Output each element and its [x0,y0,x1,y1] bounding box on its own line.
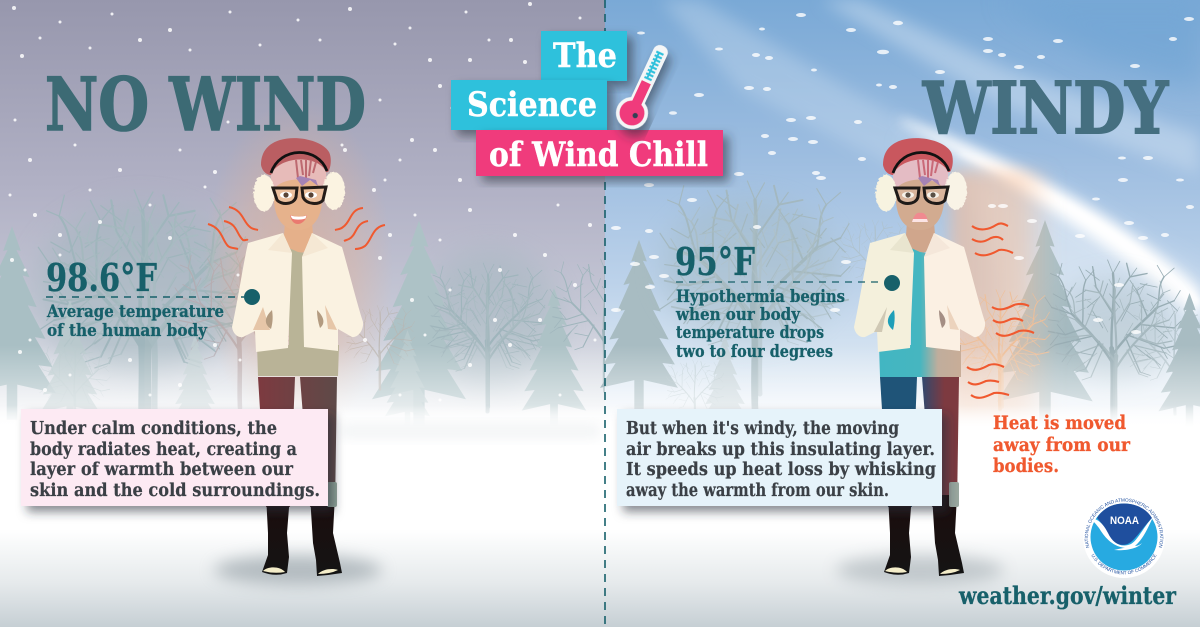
logo: NOAA [1084,498,1164,578]
panel: windy conditions note [617,409,942,506]
text line 4: away the warmth from our skin. [626,481,889,501]
beanie stripes [296,160,316,178]
panel: windy background [600,0,1200,627]
heat note [993,412,1131,477]
line 3: bodies. [993,455,1059,477]
ground shadow: left figure [214,555,382,585]
jacket right [302,233,363,351]
hands [253,305,337,330]
trouser right [922,377,959,507]
line 3: temperature drops [676,323,824,343]
leader line [46,296,244,298]
collar right [924,233,950,257]
pockets [266,310,323,329]
title block: the science of wind chill [451,31,723,176]
line 1: Hypothermia begins [676,287,845,307]
glasses [273,187,326,203]
boot soles [263,567,338,574]
logo: NOAA: NOAA [1110,515,1139,527]
neck [905,222,936,254]
heat waves: right figure [967,223,1034,398]
trousers [258,377,337,507]
callout: 98.6 F [46,255,260,341]
jacket right [924,233,985,351]
snow: right side [611,13,1194,334]
headband [271,152,327,173]
title box: of wind chill [476,130,723,176]
earmuff left [254,174,274,212]
title box: science [451,80,607,130]
beanie fold [271,160,326,198]
temperature reading: 98.6°F [46,255,157,300]
stripes [918,160,938,178]
snow: left side [8,2,596,402]
collar left [890,233,914,253]
headband [893,152,949,173]
boots [884,495,964,576]
earmuff right [945,172,967,210]
text line 2: air breaks up this insulating layer. [626,440,935,460]
panel: calm conditions note [21,409,328,506]
hair fringe [296,176,318,186]
logo: NOAA: U.S. DEPARTMENT OF COMMERCE [1092,554,1157,574]
cuff [327,482,337,507]
mouth [912,213,928,222]
beanie [261,138,331,175]
hand left [874,307,887,332]
pocket left [888,310,895,330]
teeth [912,219,928,222]
shirt [911,248,927,350]
shirt hem [257,345,339,376]
title box: the [541,31,627,81]
panel: no wind background [0,0,660,627]
text line 2: body radiates heat, creating a [30,440,297,460]
logo: NOAA: NATIONAL OCEANIC AND ATMOSPHERIC ADMINISTRATION [1084,498,1164,548]
temperature reading: 95°F [675,239,755,284]
jacket left [854,233,914,352]
description line 1: Average temperature [46,302,224,322]
trouser left [880,377,917,507]
figure: windy person [854,138,985,576]
leader line [676,281,882,283]
text line 4: skin and the cold surroundings. [30,481,320,501]
icon: thermometer [611,39,678,134]
shirt hem [879,345,961,377]
shirt [289,248,305,350]
marker dot [884,275,900,291]
eyes [902,192,939,198]
line 2: away from our [993,434,1131,456]
figure: no wind person [232,138,363,576]
text line 3: layer of warmth between our [30,460,294,480]
title text: science: Science [467,85,597,125]
callout: 95 F [675,239,900,362]
face [274,180,322,230]
boot soles [885,567,960,574]
collars [268,233,328,257]
line 4: two to four degrees [676,342,833,362]
hand right [947,305,959,330]
heading: no wind: NO WIND [45,62,366,148]
description line 2: of the human body [47,321,208,341]
beanie fold [893,160,948,198]
face [896,180,944,230]
glasses [895,187,948,203]
mouth [290,215,307,224]
text line 3: It speeds up heat loss by whisking [626,460,936,480]
center dashed divider [604,0,606,627]
boots [262,495,342,576]
earmuff left [876,174,896,212]
text line 1: But when it's windy, the moving [626,419,899,439]
beanie [883,138,953,175]
heat waves: left figure [208,207,385,249]
title text: the: The [553,36,617,76]
line 2: when our body [675,305,801,325]
jacket left [232,233,292,352]
text line 1: Under calm conditions, the [30,419,277,439]
neck [283,222,314,254]
marker dot [244,289,260,305]
ground shadow: right figure [836,555,1004,585]
pocket right [939,310,945,328]
earmuff right [323,172,345,210]
cuff [949,482,959,507]
eyes [280,192,317,198]
hair fringe [918,176,940,186]
line 1: Heat is moved [993,412,1126,434]
title text: of wind chill: of Wind Chill [489,135,708,175]
teeth [290,216,306,220]
